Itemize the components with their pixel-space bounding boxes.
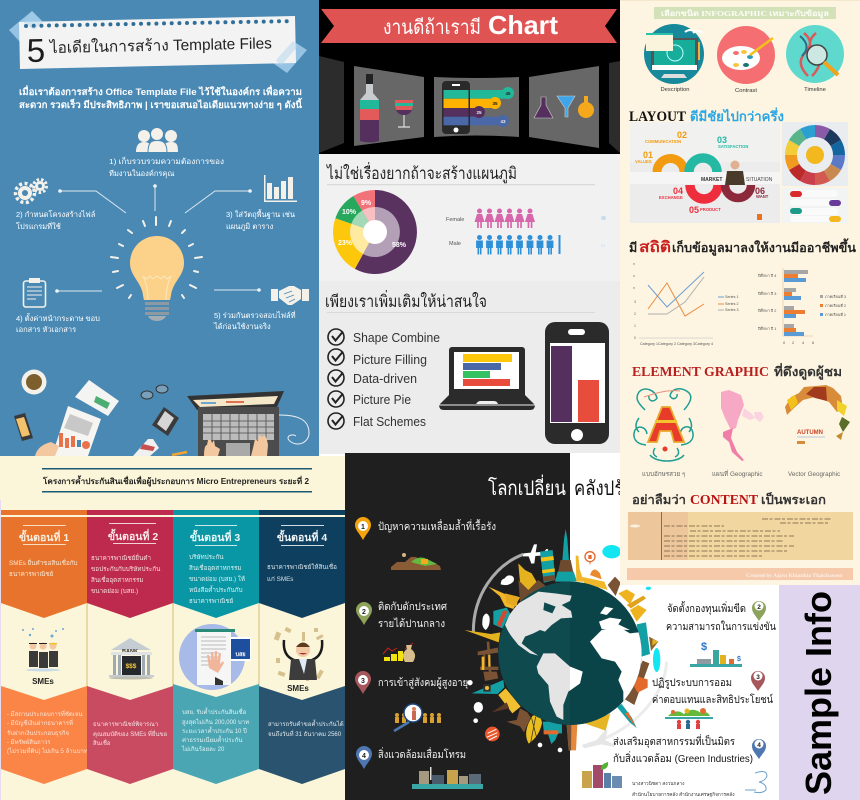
checklist: Shape Combine — [353, 330, 440, 345]
sample info band — [779, 585, 860, 800]
desk scene — [14, 370, 309, 456]
note paper title: ไอเดียในการสร้าง Template Files — [48, 34, 272, 57]
ribbon heading: งานดีถ้าเรามี — [383, 17, 481, 39]
ribbon heading: Chart — [488, 10, 558, 40]
report paper — [52, 406, 101, 456]
icon: light bulb — [111, 217, 202, 321]
layout image: market situation: SATISFACTION — [718, 144, 748, 149]
step 3 arrow: หนังสือค้ำประกันกับ — [189, 585, 243, 594]
title: คลังปรับ — [574, 478, 634, 500]
step 3 arrow — [173, 510, 259, 618]
bar chart: 6 — [812, 341, 814, 345]
bar chart: ปีศึกษา ปี 1 — [757, 326, 776, 331]
bar chart: 2 — [792, 341, 794, 345]
lower block 2: สินเชื่อ — [93, 739, 111, 747]
step 3 arrow: บริษัทประกัน — [189, 553, 224, 561]
panel: charts — [319, 0, 620, 454]
icon: handshake — [271, 286, 309, 305]
pictogram: male: Male — [449, 241, 461, 247]
checklist: Data-driven — [353, 371, 417, 386]
pictogram: male: 81 — [601, 243, 606, 248]
checklist: Picture Filling — [353, 352, 427, 367]
step 1 text — [109, 156, 224, 178]
item 3: 3 — [361, 678, 365, 685]
layout image: market situation: 06 — [755, 186, 765, 196]
airplane — [523, 544, 548, 564]
pink map — [721, 390, 764, 461]
icon: laptop with bars — [439, 347, 535, 410]
layout image: market situation: VALUES — [635, 159, 652, 164]
notepad and pencil — [133, 439, 187, 456]
credit text — [632, 781, 735, 798]
old letter image — [628, 512, 853, 560]
decorative letter A — [634, 389, 693, 461]
right item 2: ความสามารถในการแข่งขัน — [666, 620, 776, 633]
checklist: Flat Schemes — [353, 414, 426, 429]
step 1 arrow: ธนาคารพาณิชย์ — [9, 570, 54, 578]
lower block 3: บสย. รับค้ำประกันสินเชื่อ — [182, 706, 247, 716]
heading: content: เป็นพระเอก — [761, 492, 826, 507]
icon: guarantee document — [179, 624, 251, 690]
bar chart: ภาคเรียนที่ 3 — [825, 294, 846, 299]
dividers — [86, 600, 260, 690]
item 4: สิ่งแวดล้อมเสื่อมโทรม — [378, 747, 466, 761]
step 1 arrow: ขั้นตอนที่ 1 — [19, 529, 69, 544]
lower block 3: ระยะเวลาค้ำประกัน 10 ปี — [182, 725, 247, 735]
layout image: market situation: PRODUCT — [700, 207, 721, 212]
right grey arc and plane shadow — [582, 662, 667, 748]
pictogram: female — [446, 208, 606, 228]
step 4 arrow: แก่ SMEs — [267, 576, 293, 583]
step 5 text: ได้ก่อนใช้งานจริง — [213, 322, 271, 331]
step 2 arrow: ขอประกันกับบริษัทประกัน — [91, 565, 161, 573]
line chart — [633, 263, 739, 346]
autumn circle: AUTUMN — [797, 430, 823, 436]
item 4: 4 — [362, 753, 366, 760]
continents — [505, 592, 652, 720]
heading: layout: LAYOUT — [629, 109, 686, 125]
right item 4 — [613, 734, 766, 765]
layout image: market situation: 04 — [673, 186, 683, 196]
layout image: market situation: COMMUNICATION — [645, 139, 681, 144]
bar chart — [757, 268, 846, 345]
step 4 text — [16, 313, 100, 334]
icon: bank — [109, 638, 154, 680]
item 2: รายได้ปานกลาง — [378, 617, 445, 630]
step 3 arrow: ขนาดย่อม (บสย.) ให้ — [189, 575, 245, 583]
title: โลกเปลี่ยน — [488, 474, 566, 500]
right scene 2: $ — [701, 641, 707, 653]
line chart: 0 — [634, 336, 636, 340]
icon: bar chart — [264, 175, 297, 202]
item 3 — [355, 671, 468, 731]
hand — [35, 442, 59, 456]
icon: happy businessman — [274, 627, 324, 693]
step 1 arrow — [1, 510, 87, 618]
step 2 arrow: ธนาคารพาณิชย์ยื่นคำ — [91, 553, 151, 562]
icon: clipboard — [24, 278, 46, 307]
layout image: pill list — [782, 188, 848, 223]
phone bar chart: 45 — [505, 91, 511, 96]
layout image: market situation: SITUATION — [746, 177, 773, 183]
coffee cup — [22, 370, 46, 394]
element labels: แผนที่ Geographic — [712, 469, 763, 478]
step 2 arrow: ขนาดย่อม (บสย.) — [91, 588, 138, 595]
title — [488, 474, 634, 500]
panel: changing world — [345, 453, 860, 800]
layout image: market situation: 05 — [689, 205, 699, 215]
heading: statistics — [629, 238, 856, 256]
lower block 1 — [1, 686, 88, 784]
checklist: Picture Pie — [353, 392, 411, 407]
pictogram: male — [449, 235, 606, 254]
credit text: สำนักนโยบายการคลัง สำนักงานเศรษฐกิจการคลัง — [632, 791, 735, 798]
phone — [14, 413, 33, 441]
wine glass — [395, 100, 413, 127]
heading: charts not hard: ไม่ใช่เรื่องยากถ้าจะสร้างแผนภูมิ — [325, 162, 517, 184]
item 1: 1 — [361, 524, 365, 531]
lower block 3 — [173, 684, 259, 784]
step 3 arrow: ขั้นตอนที่ 3 — [190, 529, 240, 544]
line chart: Category 1 — [640, 342, 658, 346]
icon: bank: BANK — [122, 649, 138, 655]
bar chart: ปีศึกษา ปี 2 — [757, 308, 776, 313]
layout image: market situation: 01 — [643, 150, 653, 160]
icon labels — [660, 87, 826, 94]
element labels: แบบอักษรสวย ๆ — [642, 471, 685, 478]
glasses — [141, 385, 168, 399]
step 2 text: 2) กำหนดโครงสร้างไฟล์ — [16, 210, 95, 219]
lower block 2: ธนาคารพาณิชย์พิจารณา — [93, 720, 158, 728]
heading: statistics: มี — [629, 241, 637, 255]
right item 4: ส่งเสริมอุตสาหกรรมที่เป็นมิตร — [613, 734, 735, 748]
top banner — [654, 7, 836, 19]
layout image: market situation: 03 — [717, 135, 727, 145]
step 1 text: ทีมงานในองค์กรคุณ — [109, 169, 174, 178]
line chart: Series 2 — [725, 302, 739, 306]
heading: add interest: เพียงเราเพิ่มเติมให้น่าสนใจ — [325, 290, 487, 311]
lower block 4: สามารถรับคำขอค้ำประกันได้ — [268, 718, 344, 728]
donut chart: 23% — [338, 240, 353, 247]
phone bar chart — [442, 81, 514, 134]
lower block 1: - มีบัญชีเงินฝากธนาคารที่ — [7, 719, 73, 727]
phone bar chart: 25 — [476, 110, 482, 115]
pictogram: female: Female — [446, 217, 464, 223]
bar chart: ภาคเรียนที่ 2 — [825, 303, 846, 308]
lower block 1: - มีสถานประกอบการที่ชัดเจน — [7, 710, 83, 718]
heading: element graphic — [632, 363, 842, 380]
flasks — [534, 96, 594, 118]
right item 2 — [666, 601, 776, 633]
icon: bank: $$$ — [126, 663, 137, 670]
step 2 arrow: สินเชื่ออุตสาหกรรม — [91, 575, 143, 584]
lower block 2 — [87, 686, 173, 784]
right item 3: 3 — [756, 674, 760, 681]
step 3 arrow: ธนาคารพาณิชย์ — [189, 597, 234, 605]
layout image: market situation: 02 — [677, 130, 687, 140]
phone bar chart: 43 — [500, 119, 506, 124]
step 1 arrow: SMEs ยื่นคำขอสินเชื่อกับ — [9, 558, 78, 567]
donut chart — [333, 190, 417, 274]
step 4 arrow — [259, 510, 345, 618]
gallery screens — [319, 56, 620, 153]
top banner: เลือกชนิด INFOGRAPHIC เหมาะกับข้อมูล — [661, 9, 829, 19]
line chart: Series 3 — [725, 308, 739, 312]
envelope — [75, 380, 119, 416]
calculator — [152, 407, 179, 436]
heading: content — [632, 492, 826, 508]
panel: micro entrepreneurs — [0, 456, 345, 800]
line chart: 2 — [634, 312, 636, 316]
lower block 1: รับฝากเงินประกอบธุรกิจ — [7, 730, 69, 737]
item 3: การเข้าสู่สังคมผู้สูงอายุ — [378, 677, 468, 689]
step 5 text: 5) ร่วมกันตรวจสอบไฟล์ที่ — [214, 310, 296, 320]
heading: element graphic: ที่ดึงดูดผู้ชม — [774, 363, 842, 380]
step 2 arrow — [87, 510, 173, 618]
step 3 text — [226, 209, 295, 231]
item 1: ปัญหาความเหลื่อมล้ำที่เรื้อรัง — [378, 519, 496, 533]
sample info band: Sample Info — [798, 591, 839, 795]
autumn circle — [785, 385, 850, 444]
icon: SME people: SMEs — [32, 677, 54, 686]
right item 4: 4 — [757, 742, 761, 749]
right item 4: กับสิ่งแวดล้อม (Green Industries) — [613, 751, 753, 765]
clouds — [467, 545, 660, 752]
step 2 text — [16, 210, 95, 231]
panel: template files — [0, 0, 319, 456]
wine bottle — [360, 74, 379, 142]
logo — [745, 772, 767, 793]
item 2: 2 — [362, 609, 366, 616]
layout image: wheel infographic — [782, 122, 848, 186]
lower block 2: คุณสมบัติของ SMEs ที่ยื่นขอ — [93, 730, 168, 738]
element labels — [642, 469, 840, 478]
balloons — [485, 552, 595, 741]
icon: guarantee document: บสย — [235, 651, 246, 658]
green factory — [582, 762, 622, 788]
lower block 1: - มีทรัพย์สินถาวร — [7, 738, 51, 746]
icon: gears — [16, 180, 46, 202]
heading: statistics: สถิติ — [639, 238, 671, 256]
icon labels: Description — [660, 87, 690, 93]
step 3 arrow: สินเชื่ออุตสาหกรรม — [189, 563, 241, 572]
heading: element graphic: ELEMENT GRAPHIC — [632, 365, 769, 380]
right item 2: 2 — [757, 604, 761, 611]
line chart: Category 2 — [658, 342, 676, 346]
lower block 1: (ไม่รวมที่ดิน) ไม่เกิน 5 ล้านบาท — [7, 747, 88, 755]
left landmarks — [464, 529, 577, 750]
item 2 — [356, 601, 447, 662]
globe with landmarks — [464, 529, 667, 752]
layout image: market situation: EXCHANGE — [659, 195, 683, 200]
heading: statistics: เก็บข้อมูลมาลงให้งานมีออาชีพขึ้น — [672, 238, 856, 256]
step 4 arrow: ขั้นตอนที่ 4 — [277, 529, 327, 544]
lower block 3: ไม่เกินร้อยละ 20 — [181, 745, 225, 753]
icon labels: Timeline — [804, 87, 826, 93]
right item 3: ปฏิรูประบบการออม — [652, 677, 732, 689]
laptop — [187, 391, 309, 456]
note paper title: 5 — [26, 32, 46, 69]
lower block 3: สูงสุดไม่เกิน 200,000 บาท — [182, 718, 249, 726]
step 5 text — [213, 310, 296, 331]
layout image: market situation: WANT — [756, 194, 769, 199]
bar chart: ภาคเรียนที่ 1 — [825, 312, 846, 317]
line chart: 3 — [634, 300, 636, 304]
bar chart: 4 — [802, 341, 804, 345]
icon labels: Contrast — [735, 88, 757, 94]
bar chart: ปีศึกษา ปี 3 — [757, 291, 776, 296]
heading: content: CONTENT — [690, 493, 759, 508]
intro text: เมื่อเราต้องการสร้าง Office Template File ไว้ใช้ในองค์กร เพื่อความ — [19, 84, 302, 98]
icon: people — [136, 128, 178, 152]
lower block 4 — [259, 686, 345, 784]
step 3 text: แผนภูมิ ตาราง — [226, 222, 274, 231]
icon: timeline dna — [786, 25, 844, 83]
title: โครงการค้ำประกันสินเชื่อเพื่อผู้ประกอบการ Micro Entrepreneurs ระยะที่ 2 — [42, 475, 310, 487]
ribbon heading — [321, 9, 617, 43]
line chart: Series 1 — [725, 295, 739, 299]
element labels: Vector Geographic — [788, 471, 840, 478]
step 1 text: 1) เก็บรวบรวมความต้องการของ — [109, 156, 224, 166]
credit text: นางสาวนิชดา สงวนกลาง — [632, 781, 684, 787]
line chart: 1 — [634, 324, 636, 328]
item 2: ติดกับดักประเทศ — [378, 601, 447, 613]
heading: content: อย่าลืมว่า — [632, 493, 686, 507]
credit bar — [627, 568, 853, 580]
icon: happy businessman: SMEs — [287, 684, 309, 693]
bar chart: 0 — [783, 341, 785, 345]
line chart: Category 3 — [677, 342, 695, 346]
icon: smartphone with bars — [545, 322, 609, 444]
layout image: market situation: MARKET — [701, 177, 722, 183]
step 4 arrow: ธนาคารพาณิชย์ให้สินเชื่อ — [267, 562, 337, 571]
panel: infographic tips — [620, 0, 860, 585]
step 3 text: 3) ใส่วัตถุพื้นฐาน เช่น — [226, 209, 295, 219]
right scene 3 — [665, 708, 713, 729]
note paper title — [9, 11, 307, 73]
intro text: สะดวก รวดเร็ว มีประสิทธิภาพ | เราขอเสนอไอเดียแนวทางง่าย ๆ ดังนี้ — [19, 97, 303, 111]
donut chart: 10% — [342, 209, 357, 216]
lower block 4: จนถึงวันที่ 31 ธันวาคม 2560 — [268, 730, 342, 738]
line chart: Category 4 — [695, 342, 713, 346]
step 4 text: เอกสาร หัวเอกสาร — [16, 325, 76, 334]
flight arc — [473, 554, 523, 632]
globe disc — [498, 582, 642, 725]
heading: layout — [629, 107, 784, 125]
intro text — [19, 84, 303, 111]
item 1 — [355, 517, 496, 570]
right item 3: ค่าตอบแทนและสิทธิประโยชน์ — [652, 693, 773, 706]
credit bar: Created by Ajarn Khunthia Thaicharoen — [746, 573, 842, 579]
step 2 text: โปรแกรมที่ใช้ — [16, 221, 61, 231]
step 4 text: 4) ตั้งค่าหน้ากระดาษ ขอบ — [16, 313, 100, 323]
donut chart: 58% — [392, 242, 407, 249]
heading: layout: ดีมีชัยไปกว่าครึ่ง — [690, 107, 784, 124]
bar chart: ปีศึกษา ปี 4 — [757, 273, 776, 278]
item 4 — [356, 746, 483, 789]
connector lines — [55, 184, 261, 293]
icon: description — [644, 24, 704, 84]
right landmarks — [576, 556, 658, 731]
right scene 2 — [690, 641, 742, 667]
donut chart: 9% — [361, 200, 372, 207]
icon: contrast — [717, 26, 775, 84]
right scene 2: $ — [737, 656, 741, 663]
layout image: market situation — [630, 122, 780, 223]
phone bar chart: 35 — [492, 101, 498, 106]
lower block 3: ค่าธรรมเนียมค้ำประกัน — [182, 734, 242, 744]
step 2 arrow: ขั้นตอนที่ 2 — [108, 528, 158, 543]
right item 2: จัดตั้งกองทุนเพิ่มขีด — [667, 601, 746, 615]
icon: SME people — [22, 628, 64, 686]
right item 3 — [652, 671, 773, 706]
checklist — [328, 329, 440, 429]
